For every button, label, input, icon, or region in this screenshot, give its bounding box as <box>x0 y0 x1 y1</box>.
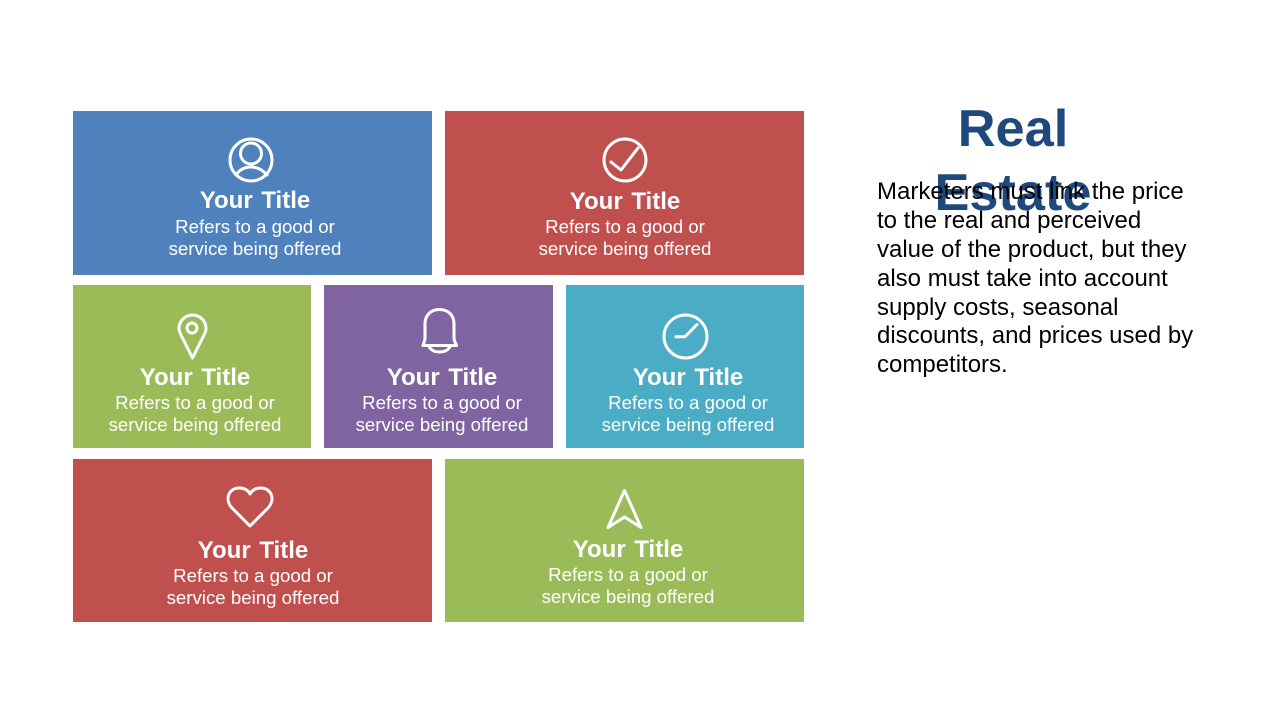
icon: heart <box>228 488 272 526</box>
card description: Refers to a good or <box>173 565 333 586</box>
heading: Real Estate: Real <box>958 100 1068 158</box>
card title: Your Title <box>633 364 743 391</box>
card title: Your Title <box>140 364 250 391</box>
card description: service being offered <box>167 587 339 608</box>
body text block: to the real and perceived <box>877 207 1141 234</box>
card description: service being offered <box>602 414 774 435</box>
icon: check mark <box>604 139 646 181</box>
panel: green card, navigation <box>445 459 804 622</box>
body text block: Marketers must link the price <box>877 178 1184 205</box>
icon: user profile <box>230 139 272 181</box>
panel: red card, heart <box>73 459 432 622</box>
card description: service being offered <box>169 238 341 259</box>
icon: map pin <box>179 315 206 358</box>
card title: Your Title <box>387 364 497 391</box>
card description: Refers to a good or <box>115 392 275 413</box>
heading: Real Estate: Estate <box>935 164 1091 222</box>
card title: Your Title <box>200 187 310 214</box>
panel: purple card, bell <box>324 285 553 448</box>
card description: Refers to a good or <box>362 392 522 413</box>
panel: blue card, profile <box>73 111 432 275</box>
panel: red card, check <box>445 111 804 275</box>
body text block: competitors. <box>877 351 1008 378</box>
body text block: supply costs, seasonal <box>877 294 1118 321</box>
icon: navigation arrow <box>608 490 641 528</box>
card description: service being offered <box>356 414 528 435</box>
card title: Your Title <box>198 537 308 564</box>
body text block: discounts, and prices used by <box>877 322 1193 349</box>
card description: service being offered <box>109 414 281 435</box>
card description: Refers to a good or <box>548 564 708 585</box>
card description: Refers to a good or <box>608 392 768 413</box>
panel: green card, location <box>73 285 311 448</box>
body text block: also must take into account <box>877 265 1168 292</box>
card title: Your Title <box>573 536 683 563</box>
card title: Your Title <box>570 188 680 215</box>
card description: Refers to a good or <box>175 216 335 237</box>
card description: service being offered <box>542 586 714 607</box>
card description: service being offered <box>539 238 711 259</box>
body text block: value of the product, but they <box>877 236 1187 263</box>
card description: Refers to a good or <box>545 216 705 237</box>
icon: clock <box>664 315 707 358</box>
panel: teal card, clock <box>566 285 804 448</box>
icon: bell <box>423 310 456 352</box>
